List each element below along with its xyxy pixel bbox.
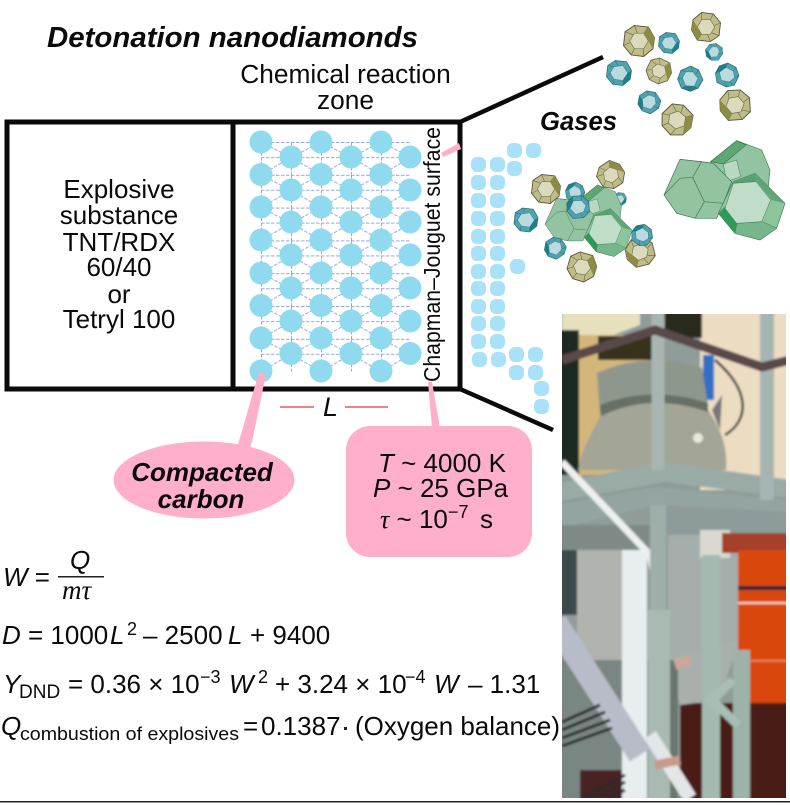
callout: detonation parameters: −7 (448, 502, 469, 522)
formula: Y DND: −4 (405, 667, 426, 687)
expanding carbon dots (471, 143, 549, 414)
formula: Y DND: Y (3, 669, 22, 699)
formula: Y DND: DND (19, 682, 60, 703)
dimension L (280, 392, 388, 422)
formula: Y DND: W (434, 669, 461, 699)
formula: Y DND (3, 667, 540, 703)
heading: chemical reaction zone: zone (317, 85, 374, 115)
formula: D: D = 1000 (2, 620, 108, 650)
formula: Q combustion (1, 711, 560, 744)
label: Chapman–Jouguet surface: Chapman–Jouguet surface (419, 127, 445, 382)
formula: Y DND: + 3.24 × 10 (275, 669, 407, 699)
panel: explosive substance: or (107, 279, 131, 309)
panel: explosive substance: 60/40 (86, 252, 152, 282)
formula: Y DND: W (229, 669, 256, 699)
formula: Q combustion: Q (1, 711, 21, 741)
formula: Q combustion: = (243, 711, 258, 741)
panel: explosive substance: substance (60, 200, 178, 230)
formula: D: L (110, 620, 124, 650)
formula: D: + 9400 (250, 620, 330, 650)
dimension L: L (323, 392, 338, 422)
heading: chemical reaction zone (240, 59, 451, 115)
callout: detonation parameters (346, 382, 532, 557)
formula: W (3, 545, 104, 605)
formula: Q combustion: combustion of explosives (20, 724, 239, 744)
panel: explosive substance: Tetryl 100 (63, 304, 175, 334)
pointer: Chapman–Jouguet surface (441, 143, 461, 157)
formula: D: – 2500 (143, 620, 223, 650)
formula: Q combustion: 0.1387 (261, 711, 341, 741)
formula: Y DND: – 1.31 (468, 669, 540, 699)
icon: scattered nanodiamond crystals, upper group (606, 12, 753, 142)
callout: detonation parameters: T ~ 4000 K (378, 448, 507, 478)
callout: detonation parameters: τ ~ 10 (380, 504, 448, 534)
formula: Y DND: −3 (200, 667, 221, 687)
formula: Y DND: = 0.36 × 10 (68, 669, 200, 699)
icon: large green diamond cluster (664, 141, 785, 240)
formula: D: 2 (127, 619, 137, 639)
heading: chemical reaction zone: Chemical reaction (240, 59, 451, 89)
photo: detonation chamber (555, 305, 790, 805)
label: gases: Gases (540, 108, 617, 136)
panel: chemical reaction zone lattice (233, 122, 460, 389)
callout: compacted carbon: Compacted (131, 457, 274, 487)
formula: D (2, 619, 330, 650)
callout: compacted carbon: carbon (158, 484, 244, 514)
formula: W: W = (3, 562, 50, 592)
callout: compacted carbon (114, 372, 294, 518)
formula: W: Q (70, 545, 90, 575)
formula: Y DND: 2 (258, 667, 268, 687)
callout: detonation parameters: P ~ 25 GPa (373, 473, 509, 503)
callout: detonation parameters: s (480, 504, 493, 534)
panel: explosive substance: Explosive (63, 174, 175, 204)
formula: Q combustion: (Oxygen balance) (355, 711, 560, 741)
panel: explosive substance: TNT/RDX (63, 227, 175, 257)
formula: D: L (228, 620, 242, 650)
icon: small green diamond cluster with crystals (514, 156, 659, 284)
formula: W: mτ (62, 575, 92, 605)
title: Detonation nanodiamonds (47, 22, 418, 54)
expansion lines (460, 57, 603, 430)
panel: explosive substance (7, 122, 233, 389)
